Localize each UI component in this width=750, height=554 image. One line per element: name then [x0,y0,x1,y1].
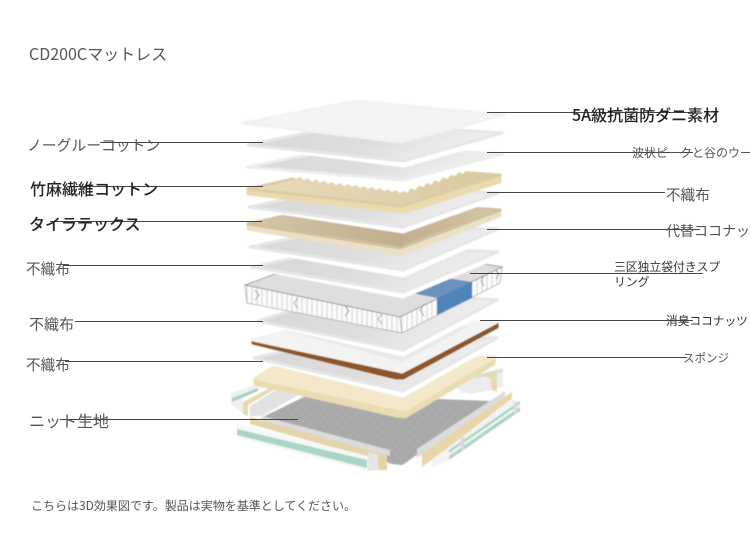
label: pocket spring: リング [614,273,650,290]
front right rail [417,391,520,468]
mattress exploded layers [231,101,520,471]
spring clips [255,270,499,324]
layer: non-woven fabric 2 [258,290,497,355]
layer: bamboo hemp cotton [248,165,500,212]
layer: 5A antibacterial top cover [243,101,504,142]
front left rail [237,416,390,471]
layer: deodorising coconut [253,322,497,378]
layer: grey sheet [250,225,498,276]
back left rail [231,382,300,416]
layer: three-zone pocket spring [245,263,502,333]
layer: wave peak and valley wool [246,145,503,193]
label: 5A antibacterial: 5A級抗菌防ダニ素材 [572,102,719,126]
label: knit fabric: ニット生地 [29,408,109,432]
layer: non-woven fabric right [249,185,498,232]
layer: tylatex [248,200,500,254]
back right rail [455,367,503,394]
label: deodorising coconut: 消臭ココナッツ [666,312,748,329]
label: no-glue cotton: ノーグルーコットン [27,134,160,156]
footnote: こちらは3D効果図です。製品は実物を基準としてください。 [31,497,356,514]
label: non-woven right: 不織布 [666,184,710,205]
label: tylatex: タイラテックス [29,211,141,235]
label: pocket spring: 三区独立袋付きスプ [614,258,720,275]
layer: no-glue cotton [248,123,502,166]
title: CD200Cマットレス [29,41,167,65]
layer: non-woven fabric 3 [254,335,497,396]
label: non-woven left 2: 不織布 [29,314,74,334]
base frame with knit fabric [231,367,520,471]
label: non-woven left 3: 不織布 [26,354,70,375]
label: sponge: スポンジ [683,350,729,366]
leader lines [50,112,703,420]
label: non-woven left 1: 不織布 [26,258,70,279]
layer: non-woven fabric 1 [252,245,498,297]
label: bamboo hemp cotton: 竹麻繊維コットン [30,176,158,200]
layer: sponge [255,357,495,417]
blue zone [412,278,472,315]
knit fabric panel [265,395,490,464]
label: pocket spring [614,258,720,290]
